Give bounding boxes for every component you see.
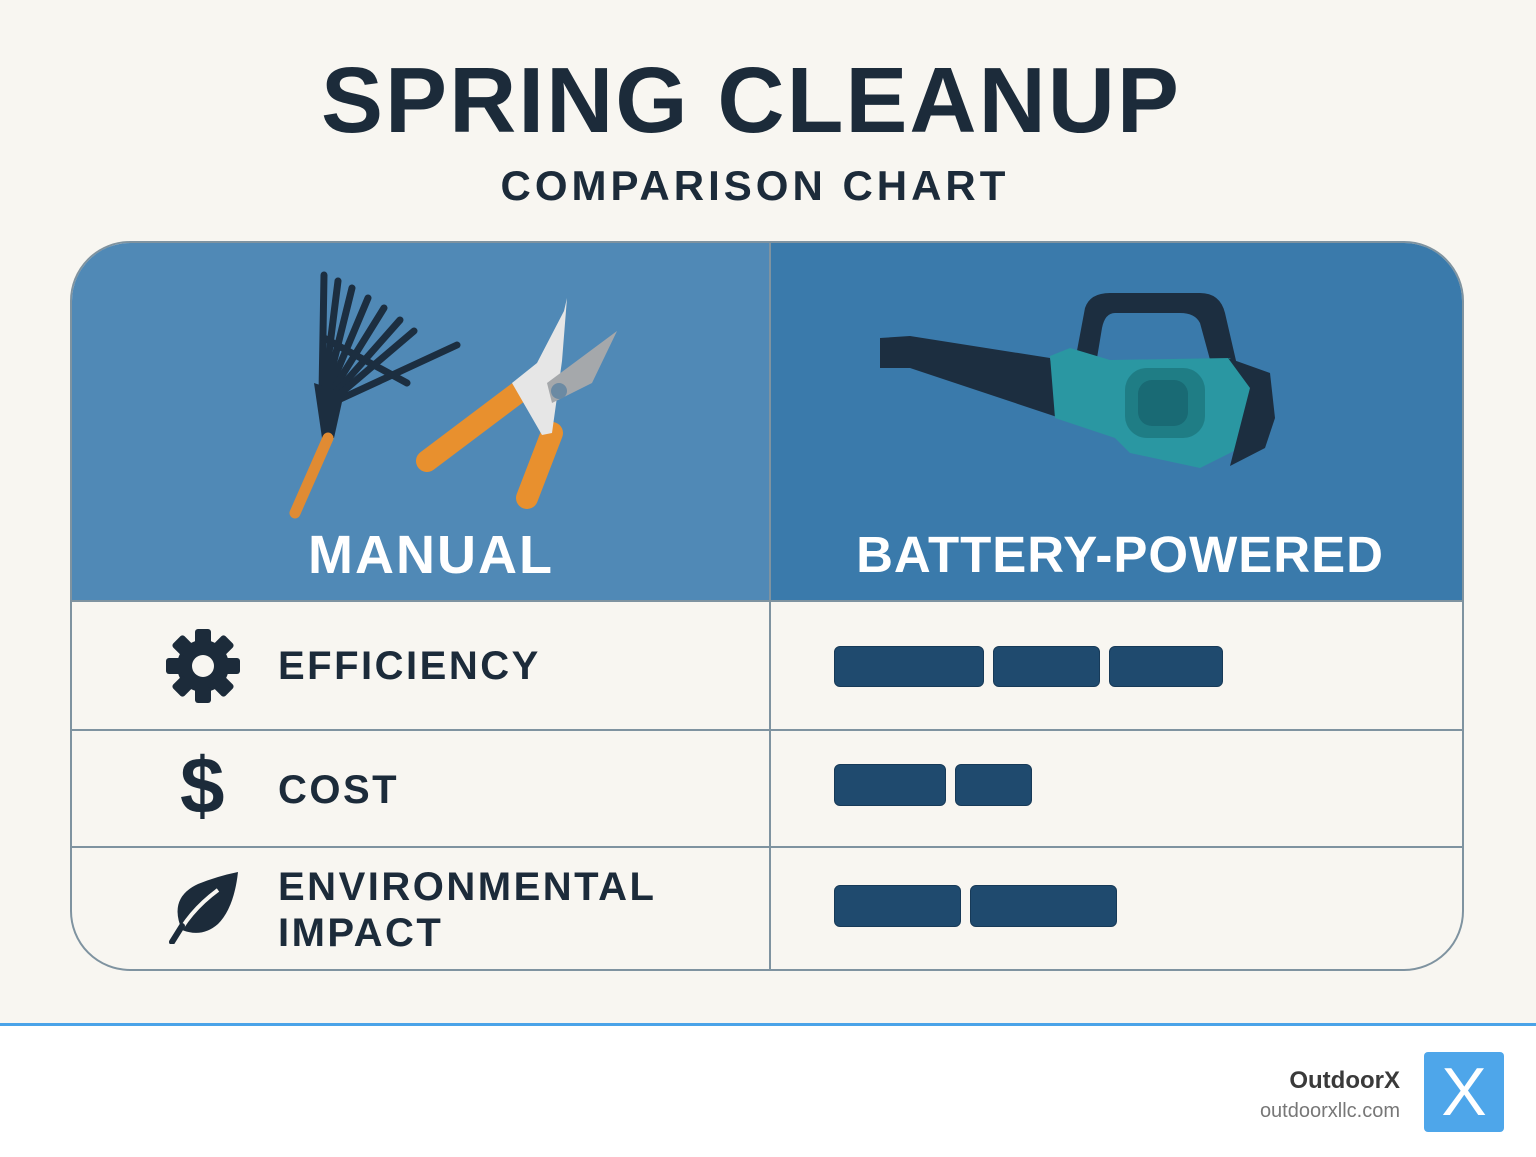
bars: environmental impact [834,885,1117,927]
brand text: OutdoorX [1289,1067,1400,1094]
icon: rake and pruners [290,272,617,518]
icon: gear [166,629,240,703]
label: environmental impact: IMPACT [278,911,443,955]
row: environmental impact [169,865,656,955]
comparison table [70,241,1464,971]
title: SPRING CLEANUP [321,48,1181,152]
header: manual [72,243,770,601]
icon: dollar: $ [180,741,224,830]
brand text: outdoorxllc.com [1260,1100,1400,1122]
heading: battery-powered: BATTERY-POWERED [856,526,1384,583]
footer [0,1023,1536,1157]
label: environmental impact: ENVIRONMENTAL [278,865,656,909]
row: efficiency [166,629,541,703]
bars: efficiency [834,646,1223,687]
icon: leaf [169,872,238,944]
icon: leaf blower [880,293,1275,468]
brand text [1260,1067,1400,1122]
bars: cost [834,764,1032,806]
heading: manual: MANUAL [308,525,554,585]
logo [1424,1052,1504,1132]
logo: X [1441,1054,1487,1130]
label: environmental impact [278,865,656,955]
header: battery-powered [770,243,1466,601]
row: cost [180,741,399,830]
subtitle: COMPARISON CHART [501,162,1009,209]
label: cost: COST [278,768,399,812]
label: efficiency: EFFICIENCY [278,644,541,688]
